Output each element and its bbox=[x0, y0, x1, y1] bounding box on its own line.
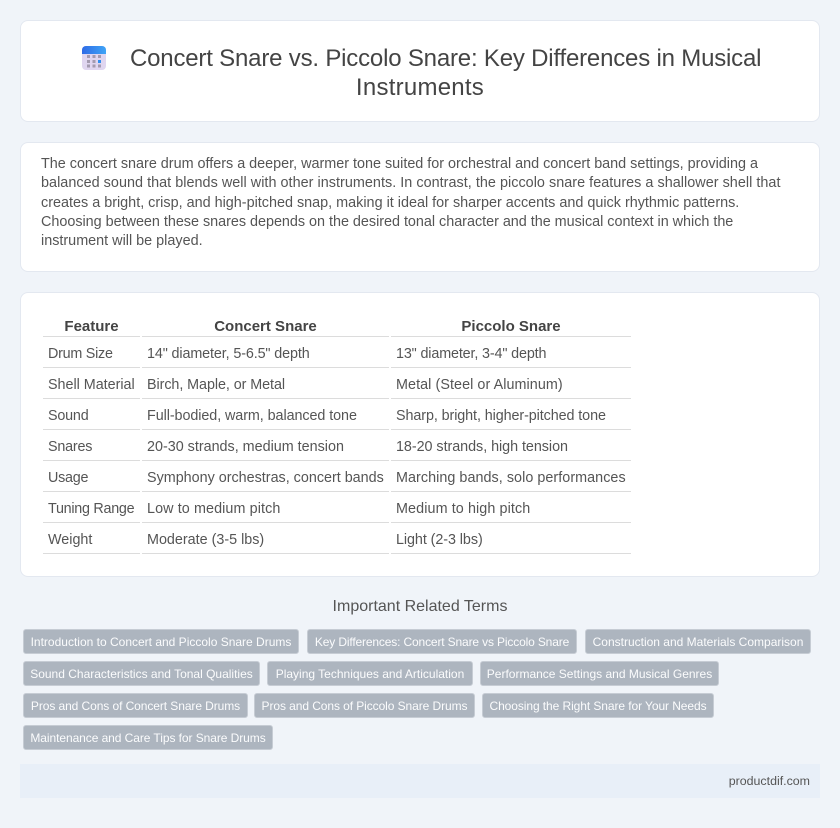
table: 20-30 strands, medium tension bbox=[147, 439, 344, 455]
title bbox=[130, 45, 761, 101]
table: Light (2-3 lbs) bbox=[396, 532, 483, 548]
table: Birch, Maple, or Metal bbox=[147, 377, 285, 393]
related term tags: Construction and Materials Comparison bbox=[593, 635, 803, 649]
related term tags: Performance Settings and Musical Genres bbox=[487, 667, 712, 681]
related term tags: Pros and Cons of Concert Snare Drums bbox=[31, 699, 240, 713]
title: Instruments bbox=[356, 74, 484, 101]
intro text: creates a bright, crisp, and high-pitched snap, making it ideal for sharper accents and quick rhythmic patterns. bbox=[41, 195, 739, 211]
table: Weight bbox=[48, 532, 92, 548]
related term tags: Sound Characteristics and Tonal Qualities bbox=[30, 667, 253, 681]
table header bbox=[64, 318, 561, 335]
table: Usage bbox=[48, 470, 88, 486]
table: 14" diameter, 5-6.5" depth bbox=[147, 346, 310, 362]
table: Metal (Steel or Aluminum) bbox=[396, 377, 563, 393]
table: Symphony orchestras, concert bands bbox=[147, 470, 384, 486]
panel: comparison table bbox=[20, 292, 820, 577]
intro text: balanced sound that blends well with other instruments. In contrast, the piccolo snare features a shallower shell that bbox=[41, 175, 780, 191]
table: 13" diameter, 3-4" depth bbox=[396, 346, 546, 362]
table: 18-20 strands, high tension bbox=[396, 439, 568, 455]
table header: Concert Snare bbox=[214, 318, 317, 335]
table: Shell Material bbox=[48, 377, 135, 393]
related term tags: Choosing the Right Snare for Your Needs bbox=[489, 699, 707, 713]
related term tags: Maintenance and Care Tips for Snare Drums bbox=[30, 731, 266, 745]
intro text: instrument will be played. bbox=[41, 233, 203, 249]
table: Tuning Range bbox=[48, 501, 134, 517]
title: Concert Snare vs. Piccolo Snare: Key Differences in Musical bbox=[130, 45, 761, 72]
table: Marching bands, solo performances bbox=[396, 470, 626, 486]
table: Moderate (3-5 lbs) bbox=[147, 532, 264, 548]
table: Snares bbox=[48, 439, 92, 455]
footer bar bbox=[20, 764, 820, 798]
panel: introduction bbox=[20, 142, 820, 272]
icon: calendar bbox=[82, 46, 106, 70]
intro text: The concert snare drum offers a deeper, warmer tone suited for orchestral and concert band settings, providing a bbox=[41, 156, 758, 172]
table bbox=[43, 318, 631, 554]
table header: Feature bbox=[64, 318, 119, 335]
table: Sharp, bright, higher-pitched tone bbox=[396, 408, 606, 424]
related term tags: Introduction to Concert and Piccolo Snare Drums bbox=[31, 635, 291, 649]
table: Full-bodied, warm, balanced tone bbox=[147, 408, 357, 424]
table: Sound bbox=[48, 408, 88, 424]
table: Medium to high pitch bbox=[396, 501, 530, 517]
intro text: Choosing between these snares depends on the desired tonal character and the musical context in which the bbox=[41, 214, 733, 230]
intro text bbox=[41, 156, 780, 249]
related term tags bbox=[23, 629, 811, 750]
related term tags: Key Differences: Concert Snare vs Piccolo Snare bbox=[315, 635, 569, 649]
related term tags: Pros and Cons of Piccolo Snare Drums bbox=[262, 699, 467, 713]
heading: related terms: Important Related Terms bbox=[333, 598, 507, 615]
related term tags: Playing Techniques and Articulation bbox=[276, 667, 464, 681]
table: Drum Size bbox=[48, 346, 113, 362]
panel: header bbox=[20, 20, 820, 122]
footer source: productdif.com bbox=[729, 774, 810, 788]
table header: Piccolo Snare bbox=[461, 318, 561, 335]
table: Low to medium pitch bbox=[147, 501, 280, 517]
